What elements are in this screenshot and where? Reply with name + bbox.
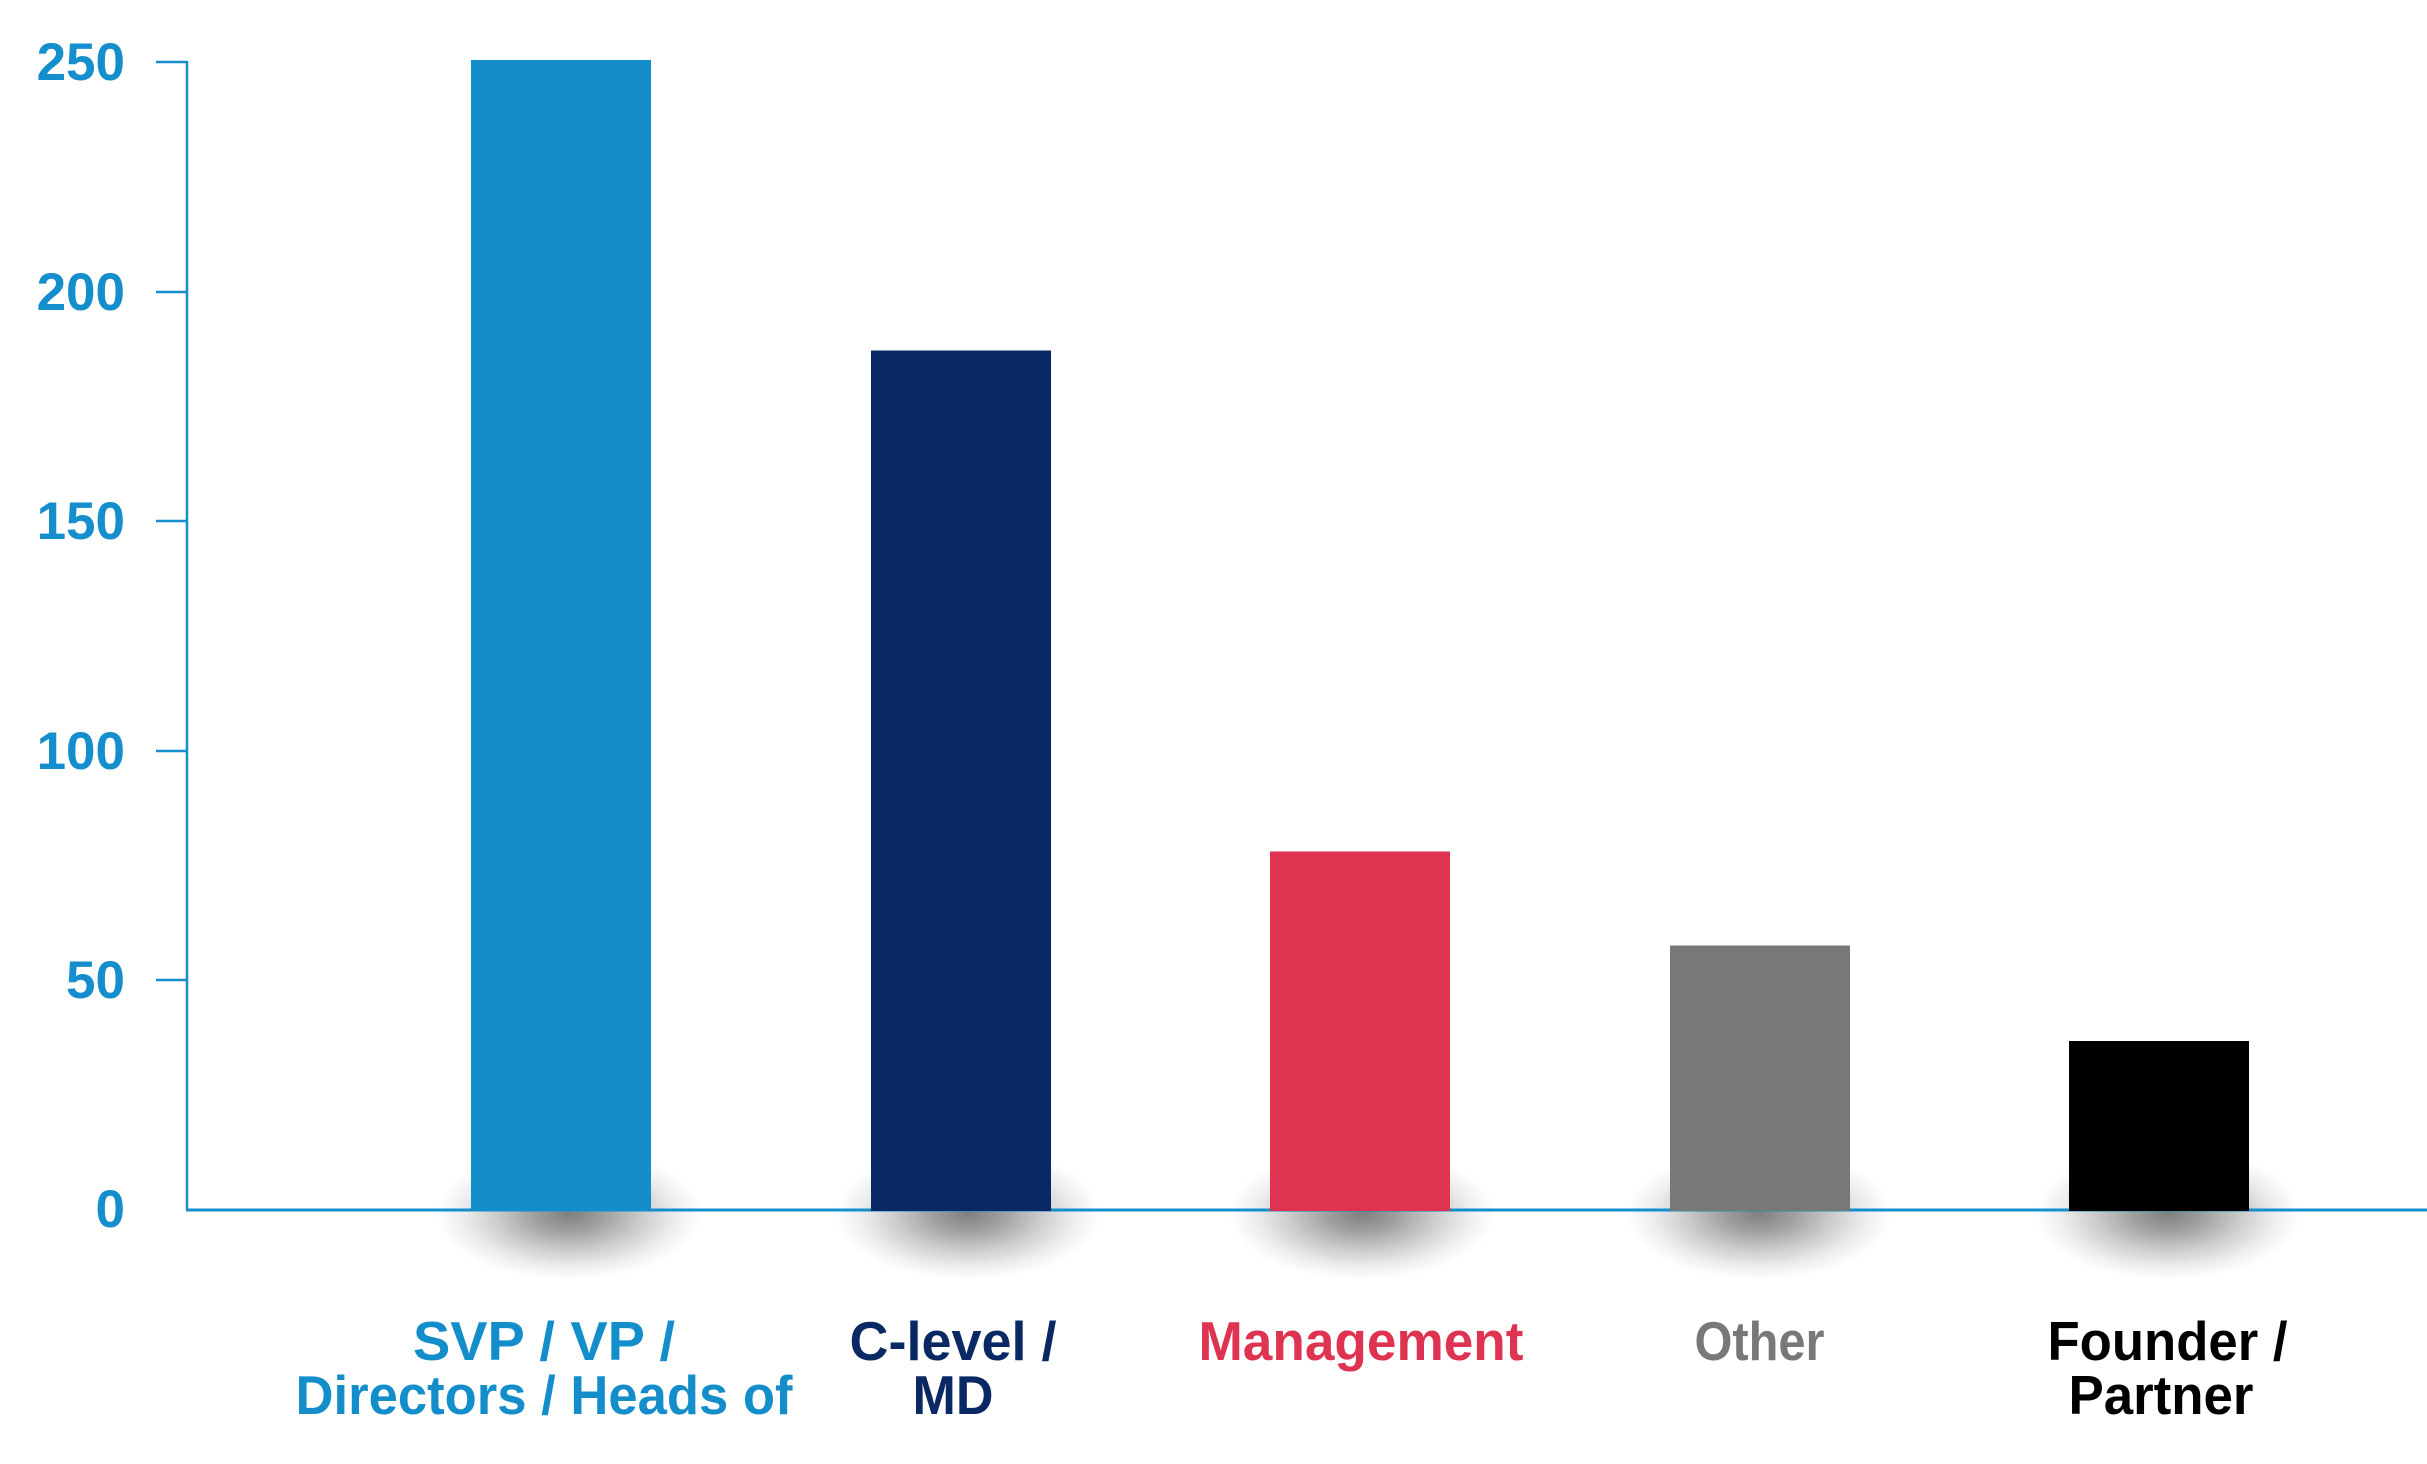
category label: SVP / VP / Directors / Heads of: SVP / VP / [413,1310,675,1372]
bar: C-level / MD [871,350,1051,1211]
category label: Founder / Partner: Founder / [2048,1310,2288,1372]
y axis labels: 0 [96,1180,125,1239]
category label: C-level / MD: MD [912,1364,994,1426]
category label: SVP / VP / Directors / Heads of [296,1310,793,1426]
y axis labels: 200 [37,263,125,322]
bar: Founder / Partner [2069,1041,2249,1211]
axes and tick marks [156,61,2427,1210]
category label: SVP / VP / Directors / Heads of: Directors / Heads of [296,1364,793,1426]
category label: C-level / MD [850,1310,1056,1426]
bar: Management [1270,852,1450,1211]
category label: Other: Other [1694,1310,1824,1372]
y axis labels: 100 [37,722,125,781]
y axis labels: 50 [66,951,125,1010]
y axis labels [37,33,125,1239]
bar: SVP / VP / Directors / Heads of [471,60,651,1211]
category label: C-level / MD: C-level / [850,1310,1056,1372]
category label: Management: Management [1198,1310,1524,1372]
category label: Founder / Partner: Partner [2068,1364,2254,1426]
bar: Other [1670,946,1850,1211]
category label: Founder / Partner [2048,1310,2288,1426]
y axis labels: 150 [37,492,125,551]
bar shadows [436,1148,2301,1280]
y axis labels: 250 [37,33,125,92]
